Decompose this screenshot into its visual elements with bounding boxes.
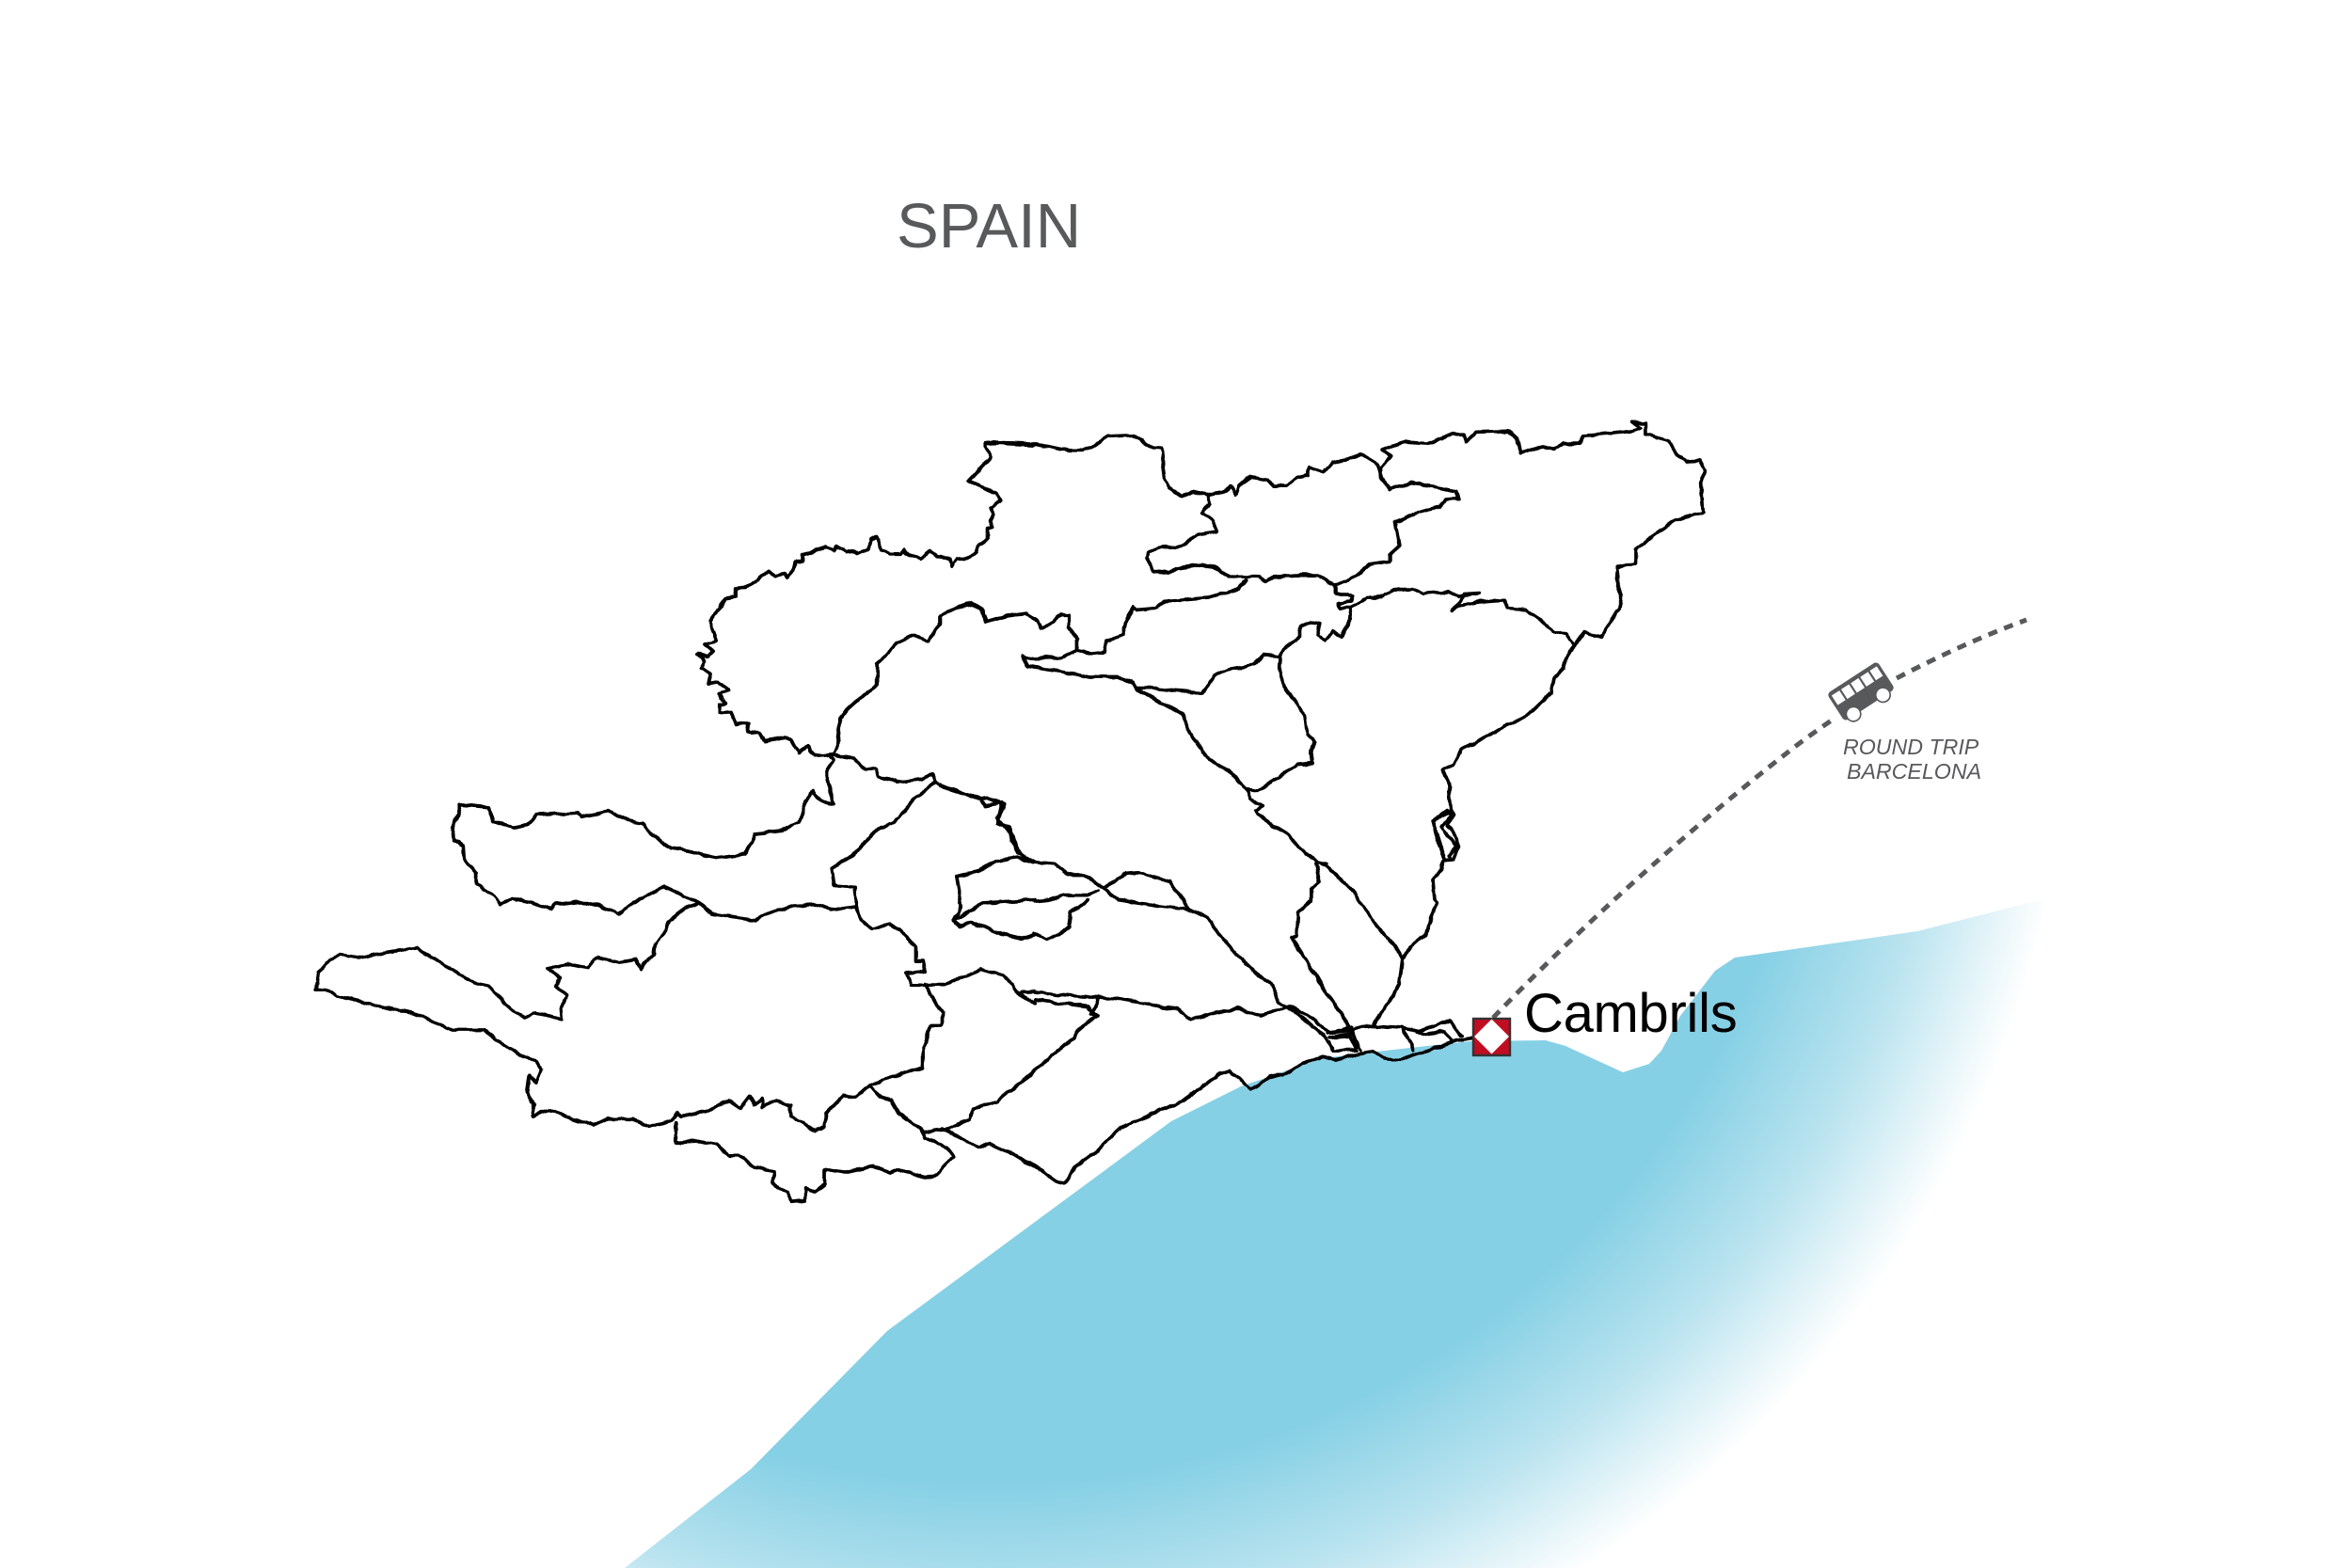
dotted route to Barcelona (1493, 620, 2026, 1018)
label: round trip Barcelona (1843, 735, 1981, 784)
label: round trip Barcelona: BARCELONA (1847, 759, 1981, 784)
map of municipal regions (316, 422, 1705, 1202)
label: round trip Barcelona: ROUND TRIP (1843, 735, 1979, 759)
label: Cambrils: Cambrils (1524, 983, 1737, 1044)
sea with fading gradient (616, 847, 2352, 1568)
title: SPAIN: SPAIN (897, 191, 1081, 261)
icon: bus (1827, 661, 1899, 726)
icon: Cambrils marker (1473, 1019, 1510, 1055)
